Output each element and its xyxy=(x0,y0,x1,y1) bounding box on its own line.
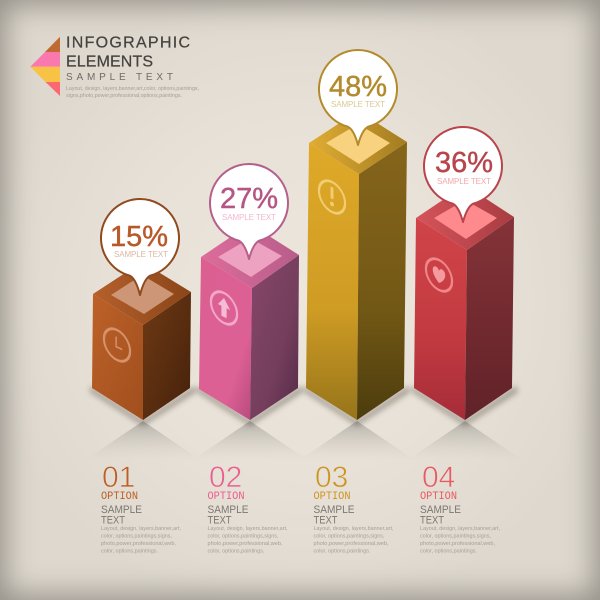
option 02 xyxy=(208,461,288,554)
option 01: OPTION xyxy=(101,491,138,503)
callout: 36%: SAMPLE TEXT xyxy=(437,177,491,186)
callout: 36% xyxy=(424,127,502,222)
header description: signs,photo,power,professional,options,paintings. xyxy=(66,93,182,99)
option 04: Layout, design, layers,banner,art, xyxy=(420,526,500,532)
callout: 48%: SAMPLE TEXT xyxy=(331,100,385,109)
option 04: OPTION xyxy=(420,491,457,503)
option 04 xyxy=(420,461,500,554)
option 01: TEXT xyxy=(101,514,125,526)
option 03: SAMPLE xyxy=(314,504,354,516)
bar shadows xyxy=(90,386,518,426)
callout: 27%: 27% xyxy=(220,183,278,215)
option 03 xyxy=(314,461,394,554)
title xyxy=(66,34,190,83)
option 02: SAMPLE xyxy=(208,504,248,516)
option 01: color, options,paintings,signs, xyxy=(101,534,172,540)
option 03: photo,power,professional,web, xyxy=(314,541,389,547)
option 02: OPTION xyxy=(208,491,244,503)
option 01 xyxy=(101,461,181,554)
callout: 48% xyxy=(319,50,397,145)
callout: 27%: SAMPLE TEXT xyxy=(222,213,276,222)
title: SAMPLE TEXT xyxy=(66,72,173,83)
option 02: 02 xyxy=(209,461,242,494)
option 03: 03 xyxy=(315,461,348,494)
bar 4: red 36% xyxy=(414,185,514,420)
bar 1: brown 15% xyxy=(92,262,191,420)
option 02: TEXT xyxy=(208,514,232,526)
callout: 15%: SAMPLE TEXT xyxy=(114,250,168,259)
option 04: color, options,paintings,signs, xyxy=(420,534,491,540)
option 03: OPTION xyxy=(314,491,350,503)
option 04: 04 xyxy=(422,461,455,494)
icon: heart xyxy=(426,254,452,296)
option 02: color, options,paintings. xyxy=(208,548,265,554)
option 03: TEXT xyxy=(314,514,338,526)
title: INFOGRAPHIC xyxy=(66,34,190,52)
option 04: photo,power,professional,web, xyxy=(420,541,495,547)
option 01: photo,power,professional,web, xyxy=(101,541,176,547)
icon: exclamation xyxy=(319,176,345,218)
option 01: 01 xyxy=(102,461,135,494)
floor reflections xyxy=(84,421,524,461)
bar 3: gold 48% xyxy=(306,111,407,420)
icon: header arrow xyxy=(30,37,60,96)
option 01: color, options,paintings. xyxy=(101,548,158,554)
header description xyxy=(66,86,199,99)
icon: clock xyxy=(104,324,130,366)
option 02: Layout, design, layers,banner,art, xyxy=(208,526,288,532)
header description: Layout, design, layers,banner,art,color, options,paintings, xyxy=(66,86,199,92)
callout: 15% xyxy=(101,199,179,295)
option 01: Layout, design, layers,banner,art, xyxy=(101,526,181,532)
option 03: color, options,paintings. xyxy=(314,548,371,554)
callout: 36%: 36% xyxy=(435,147,493,179)
callout: 48%: 48% xyxy=(329,71,387,103)
option 04: TEXT xyxy=(420,514,444,526)
icon: up arrow xyxy=(211,287,237,329)
callout: 15%: 15% xyxy=(110,221,168,253)
option 03: color, options,paintings,signs, xyxy=(314,534,385,540)
callout: 27% xyxy=(210,164,288,259)
option 03: Layout, design, layers,banner,art, xyxy=(314,526,394,532)
option 02: photo,power,professional,web, xyxy=(208,541,283,547)
option 04: SAMPLE xyxy=(420,504,461,516)
option 01: SAMPLE xyxy=(101,504,142,516)
option 04: color, options,paintings. xyxy=(420,548,477,554)
option 02: color, options,paintings,signs, xyxy=(208,534,279,540)
bar 2: pink 27% xyxy=(199,224,299,420)
title: ELEMENTS xyxy=(66,54,153,71)
